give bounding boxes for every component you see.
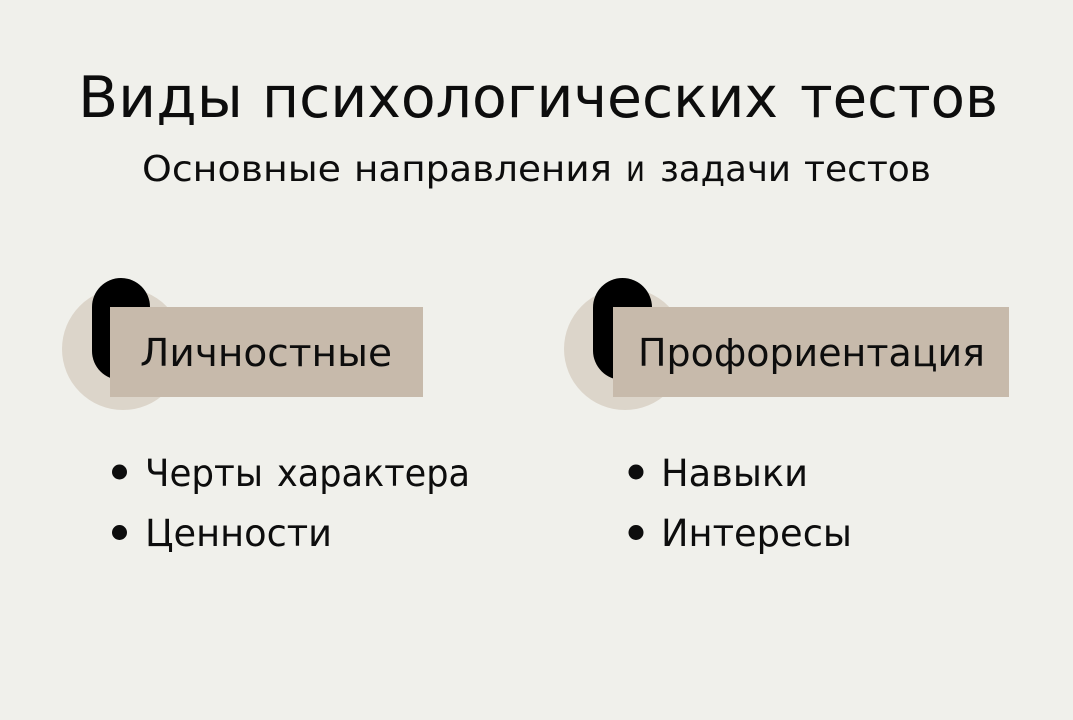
list: personality tests: Ценности bbox=[145, 512, 332, 555]
icon: circle and pill bbox=[62, 278, 167, 410]
heading: career guidance tests: Профориентация bbox=[638, 331, 985, 375]
list: career guidance tests bbox=[628, 452, 852, 555]
list: personality tests bbox=[112, 452, 470, 555]
panel: career guidance tests bbox=[564, 278, 1009, 555]
list: personality tests: характера bbox=[277, 452, 470, 495]
title: Виды bbox=[78, 65, 243, 131]
heading: personality tests: Личностные bbox=[140, 331, 392, 375]
title: тестов bbox=[800, 65, 998, 131]
subtitle: Основные bbox=[142, 149, 341, 190]
panel: personality tests bbox=[62, 278, 470, 555]
subtitle: задачи bbox=[660, 149, 791, 190]
title bbox=[78, 65, 998, 131]
title: психологических bbox=[262, 65, 778, 131]
heading: personality tests bbox=[110, 307, 423, 397]
heading: career guidance tests bbox=[613, 307, 1009, 397]
subtitle bbox=[142, 149, 931, 190]
subtitle: направления bbox=[354, 149, 612, 190]
list: career guidance tests: Интересы bbox=[661, 512, 852, 555]
icon: circle and pill bbox=[564, 278, 669, 410]
subtitle: и bbox=[626, 149, 645, 190]
subtitle: тестов bbox=[804, 149, 931, 190]
list: career guidance tests: Навыки bbox=[661, 452, 808, 495]
list: personality tests: Черты bbox=[145, 452, 263, 495]
